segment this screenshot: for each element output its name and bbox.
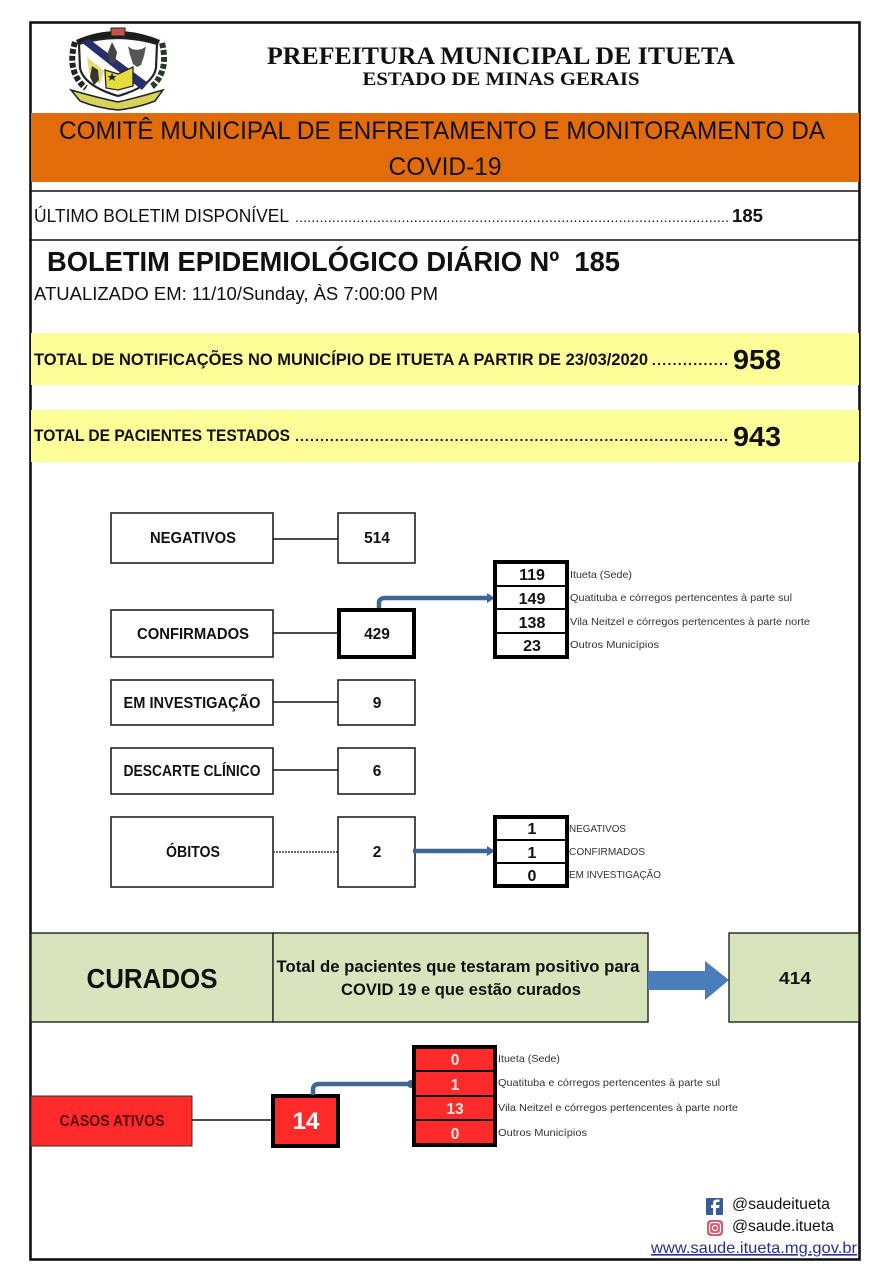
table: active by locality: Itueta (Sede) <box>498 1053 560 1065</box>
table: deaths by status: CONFIRMADOS <box>569 846 645 858</box>
band: total notifications <box>31 333 859 385</box>
row: óbitos <box>111 817 415 887</box>
panel: curados <box>31 933 648 1022</box>
table: deaths by status: NEGATIVOS <box>569 823 626 835</box>
table: active by locality <box>414 1047 738 1145</box>
row: descarte clínico <box>111 748 415 794</box>
band: total notifications: TOTAL DE NOTIFICAÇÕES NO MUNICÍPIO DE ITUETA A PARTIR DE 23/03/2020 <box>34 349 648 369</box>
band: total tested: ....................................................................................... <box>295 428 728 444</box>
arrow: curados to total <box>648 961 729 1000</box>
table: confirmed by locality: 119 <box>519 567 545 584</box>
band: total tested <box>31 410 859 462</box>
row: em investigação <box>111 680 415 725</box>
row: confirmados: 429 <box>364 626 390 643</box>
table: active by locality: Outros Municípios <box>498 1127 587 1139</box>
box: active total <box>273 1096 338 1146</box>
table: deaths by status: EM INVESTIGAÇÃO <box>569 868 661 881</box>
heading: municipal government: PREFEITURA MUNICIPAL DE ITUETA <box>267 43 735 70</box>
box: cured total <box>729 933 859 1022</box>
row: negativos: 514 <box>364 530 390 547</box>
icon: facebook <box>706 1198 723 1215</box>
panel: curados: COVID 19 e que estão curados <box>341 980 581 999</box>
panel: curados: CURADOS <box>86 963 218 994</box>
heading: municipal government <box>267 43 735 90</box>
label: casos ativos: CASOS ATIVOS <box>60 1113 164 1130</box>
text: latest bulletin: .......................................................................................................... <box>295 209 729 225</box>
band: total notifications: ............... <box>652 352 728 368</box>
arrow: confirmed breakdown <box>379 593 495 608</box>
row: confirmados <box>111 610 414 657</box>
table: active by locality: 1 <box>451 1077 460 1094</box>
heading: municipal government: ESTADO DE MINAS GERAIS <box>362 69 640 90</box>
row: em investigação: EM INVESTIGAÇÃO <box>124 694 260 712</box>
table: confirmed by locality: 149 <box>519 591 545 608</box>
text: latest bulletin: ÚLTIMO BOLETIM DISPONÍVEL <box>34 205 289 226</box>
table: deaths by status: 0 <box>528 868 537 885</box>
band: total tested: 943 <box>733 421 781 452</box>
row: negativos: NEGATIVOS <box>150 530 236 547</box>
table: confirmed by locality: Vila Neitzel e córregos pertencentes à parte norte <box>570 616 810 628</box>
table: deaths by status: 1 <box>528 821 537 838</box>
row: descarte clínico: DESCARTE CLÍNICO <box>124 763 260 780</box>
table: confirmed by locality: Outros Municípios <box>570 639 659 651</box>
banner: committee title <box>31 113 859 182</box>
table: confirmed by locality <box>495 562 810 657</box>
row: óbitos: 2 <box>373 844 381 861</box>
row: confirmados: CONFIRMADOS <box>137 626 249 643</box>
label: casos ativos <box>31 1096 192 1146</box>
icon: municipal coat of arms <box>71 28 164 110</box>
table: deaths by status: 1 <box>528 845 537 862</box>
text: latest bulletin <box>34 205 763 226</box>
icon: instagram <box>707 1220 723 1236</box>
arrow: deaths breakdown <box>413 846 495 856</box>
table: deaths by status <box>495 817 661 886</box>
table: active by locality: Vila Neitzel e córregos pertencentes à parte norte <box>498 1102 738 1114</box>
band: total tested: TOTAL DE PACIENTES TESTADOS <box>34 426 290 445</box>
table: confirmed by locality: Quatituba e córregos pertencentes à parte sul <box>570 592 792 604</box>
table: active by locality: 0 <box>451 1052 459 1069</box>
banner: committee title: COVID-19 <box>388 153 502 181</box>
text: updated at: ATUALIZADO EM: 11/10/Sunday, ÀS 7:00:00 PM <box>34 284 438 304</box>
table: confirmed by locality: Itueta (Sede) <box>570 569 632 581</box>
table: active by locality: Quatituba e córregos pertencentes à parte sul <box>498 1077 720 1089</box>
text: facebook handle: @saudeitueta <box>732 1196 830 1213</box>
arrow: active breakdown <box>313 1080 415 1095</box>
text: instagram handle: @saude.itueta <box>732 1218 834 1235</box>
table: active by locality: 13 <box>446 1101 464 1118</box>
banner: committee title: COMITÊ MUNICIPAL DE ENFRETAMENTO E MONITORAMENTO DA <box>59 116 825 145</box>
box: active total: 14 <box>293 1108 320 1135</box>
panel: curados: Total de pacientes que testaram positivo para <box>276 957 640 976</box>
table: active by locality: 0 <box>451 1126 459 1143</box>
row: negativos <box>111 513 415 563</box>
box: cured total: 414 <box>779 968 811 988</box>
table: confirmed by locality: 23 <box>523 638 541 655</box>
text: website: www.saude.itueta.mg.gov.br <box>650 1240 858 1257</box>
text: latest bulletin: 185 <box>732 206 763 226</box>
row: óbitos: ÓBITOS <box>166 843 220 861</box>
row: descarte clínico: 6 <box>373 763 382 780</box>
table: confirmed by locality: 138 <box>519 615 545 632</box>
band: total notifications: 958 <box>733 344 781 375</box>
heading: daily bulletin: BOLETIM EPIDEMIOLÓGICO DIÁRIO Nº 185 <box>47 246 620 277</box>
row: em investigação: 9 <box>373 695 382 712</box>
